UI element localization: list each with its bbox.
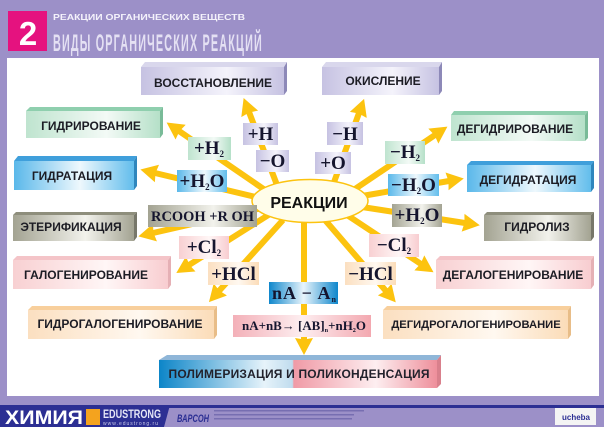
footer fine print (illegible in the source): [214, 410, 364, 420]
label: −Cl2: [369, 234, 419, 257]
arrow: to восстановление: [249, 112, 277, 185]
box: дегидрогалогенирование: [383, 306, 571, 339]
box: дегидрирование: ДЕГИДРИРОВАНИЕ: [457, 122, 573, 136]
label: polycondensation equation: O: [356, 319, 366, 333]
arrow: to поликонденсация: [301, 220, 307, 340]
box: гидрогалогенирование: [28, 306, 217, 339]
label: −H2O: 2: [417, 186, 422, 196]
central oval: реакции: РЕАКЦИИ: [270, 195, 348, 212]
label: RCOOH +R OH: RCOOH +R OH: [151, 209, 255, 225]
box: дегидрирование: [451, 111, 588, 141]
label: +Cl2: +Cl: [187, 237, 217, 258]
subtitle: РЕАКЦИИ ОРГАНИЧЕСКИХ ВЕЩЕСТВ: [53, 12, 245, 22]
box: дегалогенирование: ДЕГАЛОГЕНИРОВАНИЕ: [443, 268, 583, 282]
label: +O: +O: [320, 153, 346, 174]
arrow: to дегидрирование: [355, 135, 435, 189]
arrows radiating from centre: [153, 112, 465, 340]
label: +H: +H: [248, 124, 274, 145]
arrow: to гидрирование: [179, 131, 265, 190]
box: галогенирование: ГАЛОГЕНИРОВАНИЕ: [24, 268, 148, 282]
box: гидратация: [14, 156, 137, 190]
footer logo: school site: [555, 408, 596, 425]
box: гидролиз: [484, 212, 594, 241]
label: −HCl: −HCl: [348, 264, 393, 285]
label: polycondensation equation: 2: [353, 328, 356, 334]
box: гидратация: ГИДРАТАЦИЯ: [32, 169, 112, 183]
icon: edustrong shield: [86, 409, 100, 425]
box: гидрогалогенирование: ГИДРОГАЛОГЕНИРОВАНИЕ: [37, 317, 203, 331]
label: +HCl: +HCl: [211, 264, 256, 285]
label: +H2O left: [177, 170, 227, 192]
arrow: to гидролиз: [362, 207, 465, 223]
section number badge: [8, 11, 47, 52]
label: nA → An: nA − A: [272, 283, 331, 303]
label: +H2O left: 2: [205, 182, 210, 192]
label: +H2: +H: [194, 138, 220, 159]
arrow: to дегидратация: [362, 181, 449, 196]
label: +H2: [188, 137, 231, 160]
label: +H2O right: 2: [420, 216, 425, 226]
label: RCOOH +R OH: [148, 205, 257, 227]
arrow: to дегалогенирование: [347, 215, 421, 264]
label: +H2O left: O: [210, 171, 224, 192]
label: −H2O: −H: [391, 175, 417, 196]
arrow: to этерификация: [153, 208, 262, 233]
label: −H2O: [388, 174, 439, 196]
label: nA → An: n: [332, 295, 337, 304]
box: этерификация: ЭТЕРИФИКАЦИЯ: [20, 220, 122, 234]
arrow: to дегидрогалогенирование: [325, 220, 386, 291]
label: +H2O right: +H: [395, 205, 420, 226]
box: окисление: [322, 62, 442, 95]
footer brand: edustrong: EDUSTRONG: [103, 407, 161, 421]
title: ВИДЫ ОРГАНИЧЕСКИХ РЕАКЦИЙ: [53, 29, 262, 56]
label: −H2: 2: [416, 153, 421, 163]
label: −Cl2: −Cl: [377, 235, 407, 256]
arrow: to галогенирование: [189, 214, 270, 265]
label: −H2O: O: [421, 175, 436, 196]
label: +H2O right: [392, 204, 442, 227]
label: −Cl2: 2: [407, 246, 412, 256]
label: −H: −H: [332, 124, 358, 145]
arrow: to окисление: [333, 113, 359, 185]
label: polycondensation equation: n: [325, 328, 329, 334]
box: дегидратация: [467, 161, 594, 192]
arrow: to гидрогалогенирование: [219, 220, 283, 291]
footer logo: school site: ucheba: [562, 413, 591, 422]
label: +H2O left: +H: [180, 171, 205, 192]
label: polycondensation equation: +nH: [328, 319, 353, 333]
box: гидрирование: [26, 107, 163, 138]
label: −H2: [385, 141, 425, 164]
box: дегидратация: ДЕГИДРАТАЦИЯ: [480, 173, 576, 187]
box: полимеризация и поликонденсация: ПОЛИМЕРИЗАЦИЯ И ПОЛИКОНДЕНСАЦИЯ: [168, 367, 430, 381]
section number badge: 2: [19, 15, 37, 52]
box: гидролиз: ГИДРОЛИЗ: [504, 220, 570, 234]
label: +Cl2: 2: [217, 248, 222, 258]
label: +H2O right: O: [425, 205, 439, 226]
label: +O: [315, 152, 351, 174]
label: +H: [243, 123, 278, 145]
box: дегидрогалогенирование: ДЕГИДРОГАЛОГЕНИРОВАНИЕ: [391, 319, 561, 331]
box: восстановление: [141, 62, 287, 95]
box: гидрирование: ГИДРИРОВАНИЕ: [41, 119, 141, 133]
label: polycondensation equation: [233, 315, 371, 337]
label: +H2: 2: [220, 149, 225, 159]
label: +Cl2: [179, 236, 229, 259]
central oval: реакции: [252, 180, 368, 222]
box: восстановление: ВОССТАНОВЛЕНИЕ: [154, 76, 272, 90]
box: этерификация: [13, 212, 137, 241]
label: −H: [327, 122, 363, 145]
box: полимеризация и поликонденсация: [159, 355, 441, 388]
box: галогенирование: [13, 256, 171, 289]
box: дегалогенирование: [436, 256, 594, 289]
main white panel: [7, 58, 599, 396]
label: −H2: −H: [390, 142, 416, 163]
footer: [0, 405, 604, 427]
label: −O: −O: [260, 151, 285, 172]
label: polycondensation equation: nA+nB→ [AB]: [242, 319, 322, 333]
arrow: to гидратация: [155, 173, 260, 198]
footer web address: www.edustrong.ru: [103, 421, 158, 427]
box: окисление: ОКИСЛЕНИЕ: [345, 74, 421, 88]
footer publisher: ВАРСОН: [177, 413, 210, 425]
